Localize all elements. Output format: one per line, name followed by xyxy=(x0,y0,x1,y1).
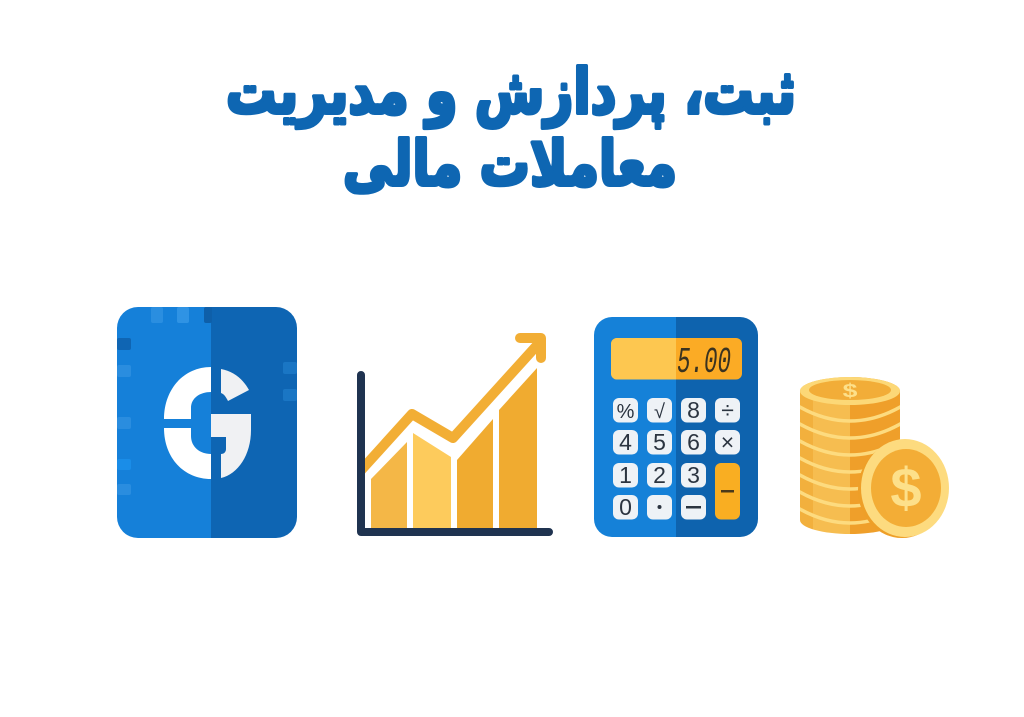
keypad: 5 xyxy=(653,429,666,455)
keypad: % xyxy=(617,401,635,423)
title: ثبت، پردازش و مدیریت xyxy=(226,55,796,128)
G letter xyxy=(164,367,251,479)
keypad: 8 xyxy=(687,397,700,423)
keypad: 1 xyxy=(619,462,632,488)
large coin xyxy=(858,439,949,538)
keypad: 2 xyxy=(653,462,666,488)
keypad: √ xyxy=(654,401,665,423)
title xyxy=(226,55,796,200)
display xyxy=(611,338,742,383)
keypad: 4 xyxy=(619,429,632,455)
icon: calculator xyxy=(594,317,758,537)
keypad: ÷ xyxy=(721,397,734,423)
title: معاملات مالی xyxy=(343,127,677,200)
keypad xyxy=(613,397,740,520)
icon: coin stack xyxy=(798,377,949,538)
icon: blue G ledger card xyxy=(117,307,297,538)
keypad: 3 xyxy=(687,462,700,488)
large coin: $ xyxy=(890,456,922,519)
keypad: 6 xyxy=(687,429,700,455)
keypad: × xyxy=(721,429,734,455)
axes xyxy=(361,375,549,532)
bars xyxy=(371,368,537,528)
stack body xyxy=(798,377,902,537)
keypad: 0 xyxy=(619,494,632,520)
icon: rising bar chart xyxy=(355,338,549,532)
stack body: $ xyxy=(843,380,858,401)
display: 5.00 xyxy=(677,342,731,383)
trend arrow xyxy=(355,338,541,477)
